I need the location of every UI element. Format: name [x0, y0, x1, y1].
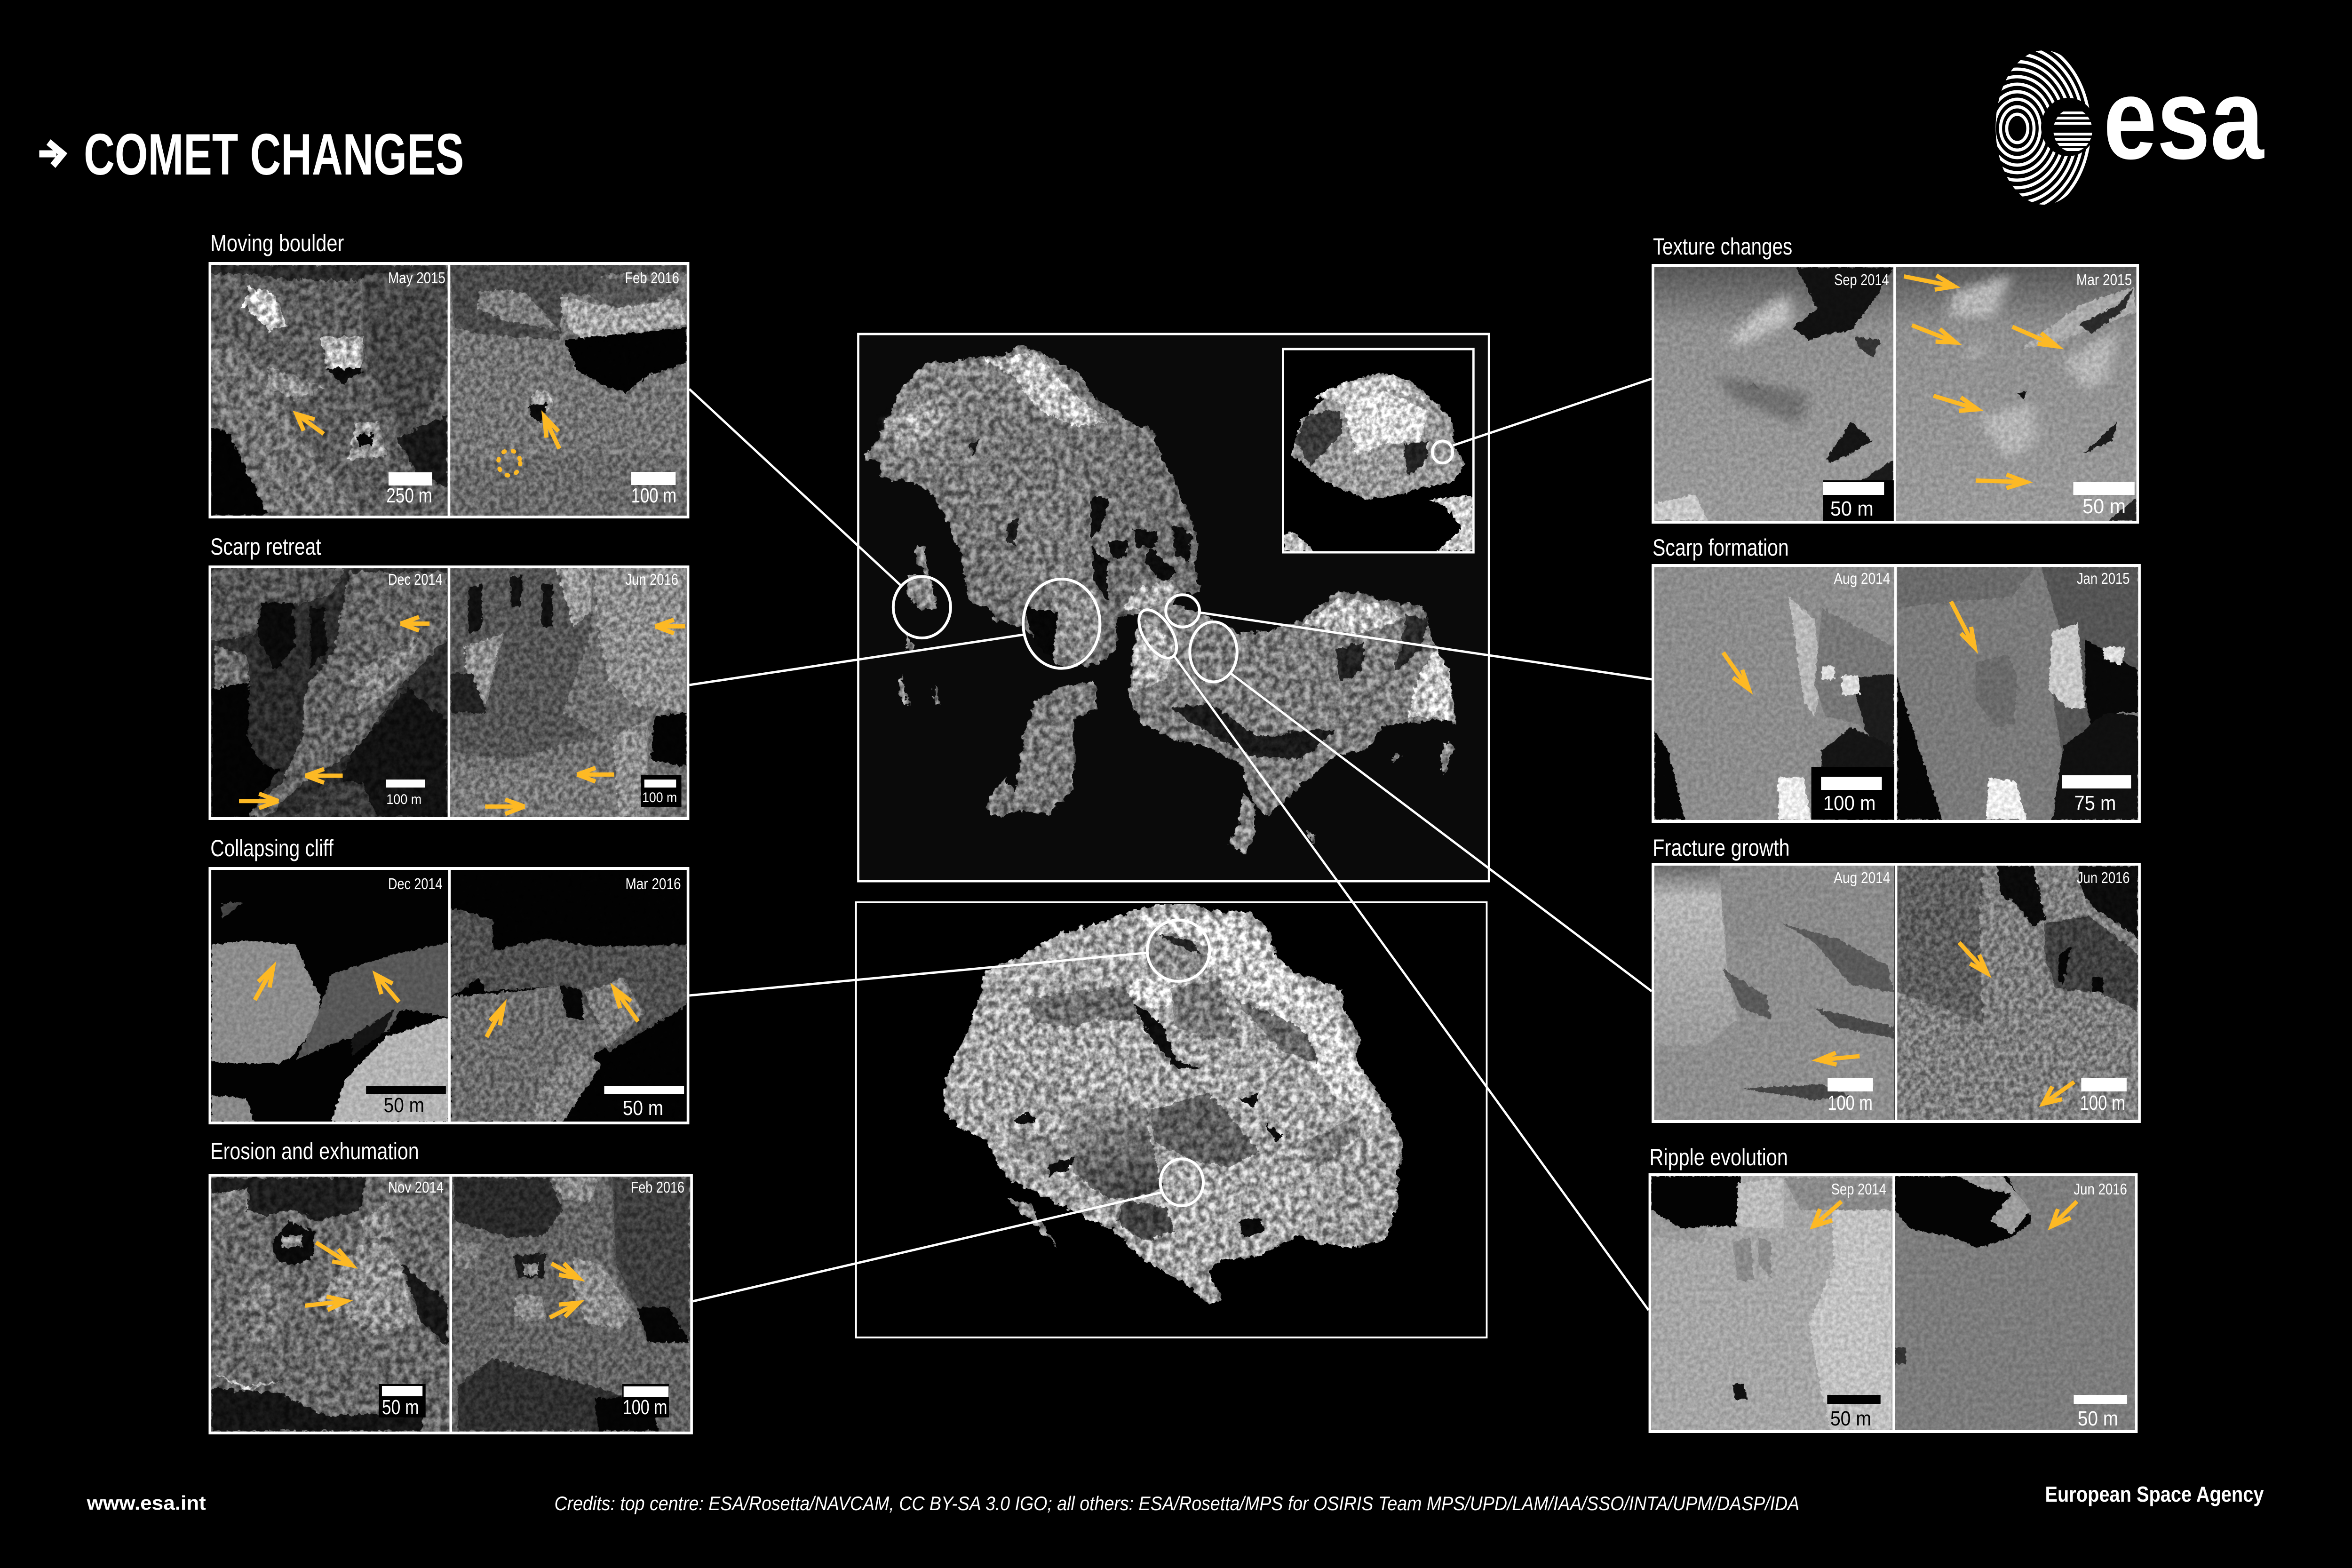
- panel: collapsing cliff: 50 m: [384, 1094, 424, 1117]
- title: [39, 122, 464, 187]
- panel: fracture growth: [1650, 835, 2142, 1123]
- connector lines: [689, 379, 1652, 1310]
- dates: Dec 2014: [388, 875, 442, 892]
- image: May 2015: [206, 261, 454, 519]
- panel: fracture growth: 100 m: [1828, 1091, 1873, 1114]
- frame: [210, 868, 688, 1123]
- heading: Collapsing cliff: [210, 836, 334, 861]
- scale bars: [1823, 482, 1884, 495]
- panel: texture changes: Mar 2015: [2076, 271, 2132, 288]
- image: Aug 2014: [1650, 862, 1899, 1123]
- title text: COMET CHANGES: [84, 122, 464, 187]
- bottom centre frame: [856, 902, 1487, 1337]
- panel: texture changes: 50 m: [1830, 497, 1874, 520]
- arrows: [1818, 942, 2074, 1104]
- scale bars: [1827, 1395, 1881, 1404]
- arrows: [255, 967, 638, 1037]
- panel: moving boulder: 250 m: [386, 484, 432, 507]
- panel: erosion and exhumation: 100 m: [623, 1396, 667, 1419]
- image: Jun 2016: [1891, 1174, 2140, 1433]
- panel: fracture growth: Jun 2016: [2077, 869, 2130, 886]
- panel: ripple evolution: 50 m: [1830, 1407, 1871, 1430]
- scale background: [1812, 767, 1894, 820]
- heading: Erosion and exhumation: [210, 1138, 419, 1164]
- panel: texture changes: [1649, 234, 2140, 523]
- panel: erosion and exhumation: [208, 1138, 695, 1433]
- icon: title arrow: [39, 142, 63, 166]
- panel: texture changes: 50 m: [2082, 495, 2126, 518]
- scale backgrounds: [379, 1384, 426, 1417]
- dates: May 2015: [388, 269, 445, 287]
- image: Jan 2015: [1893, 564, 2142, 821]
- scale bars: [389, 472, 432, 486]
- frame: [1653, 265, 2137, 522]
- heading: Scarp formation: [1653, 535, 1789, 561]
- panel: inset comet lobe: [1283, 349, 1473, 552]
- icon: ESA swirl: [1995, 50, 2092, 205]
- image: Jun 2016: [449, 566, 690, 820]
- top centre frame: [858, 334, 1489, 881]
- panel: moving boulder: Feb 2016: [625, 269, 679, 287]
- dates: Nov 2014: [388, 1178, 444, 1196]
- panel: fracture growth: 100 m: [2080, 1091, 2125, 1114]
- dates: Aug 2014: [1834, 570, 1890, 587]
- image: Aug 2014: [1650, 564, 1899, 821]
- inset frame: [1283, 349, 1473, 552]
- frame: [1653, 565, 2139, 821]
- image: Feb 2016: [449, 1175, 695, 1433]
- image: Mar 2016: [449, 867, 690, 1124]
- heading: Texture changes: [1653, 234, 1792, 260]
- panel: scarp formation: 75 m: [2074, 792, 2116, 815]
- comet photo: [944, 904, 1403, 1305]
- feature ellipses on top comet: [893, 441, 1453, 682]
- panel: scarp retreat: 100 m: [642, 790, 677, 805]
- dates: Sep 2014: [1834, 271, 1889, 288]
- image: Sep 2014: [1649, 264, 1898, 523]
- panel: bottom centre comet image: [856, 902, 1487, 1337]
- frame: [210, 263, 688, 517]
- frame: [210, 1175, 691, 1433]
- frame: [210, 567, 688, 819]
- panel: scarp formation: Jan 2015: [2077, 570, 2130, 587]
- scale bars: [1821, 777, 1882, 790]
- scale bars: [386, 780, 425, 788]
- scale background: [1823, 480, 1894, 521]
- panel: moving boulder: [206, 231, 691, 519]
- image: Dec 2014: [208, 867, 451, 1124]
- dates: Dec 2014: [388, 571, 442, 588]
- panel: collapsing cliff: [208, 836, 690, 1124]
- dates: Aug 2014: [1834, 869, 1890, 886]
- panel: collapsing cliff: Mar 2016: [625, 875, 681, 892]
- frame: [1650, 1175, 2137, 1432]
- feature ellipses on bottom comet: [1147, 920, 1210, 1206]
- website: www.esa.int: [87, 1492, 206, 1514]
- scale background: [641, 775, 682, 807]
- esa wordmark: esa: [2103, 55, 2265, 183]
- arrows and dotted outline: [296, 414, 559, 476]
- panel: scarp retreat: 100 m: [386, 792, 421, 807]
- agency name: European Space Agency: [2045, 1483, 2264, 1506]
- scale bars: [382, 1386, 422, 1396]
- ESA logo: [1995, 50, 2265, 205]
- panel: scarp formation: [1650, 535, 2142, 821]
- arrows: [305, 1242, 579, 1318]
- frame: [1653, 864, 2139, 1122]
- heading: Fracture growth: [1653, 835, 1790, 861]
- panel: collapsing cliff: 50 m: [623, 1097, 663, 1120]
- dates: Sep 2014: [1831, 1180, 1886, 1198]
- scale bars: [366, 1086, 446, 1094]
- footer: [87, 1483, 2264, 1514]
- image: Mar 2015: [1893, 264, 2140, 523]
- heading: Ripple evolution: [1649, 1145, 1788, 1170]
- panel: moving boulder: 100 m: [631, 484, 676, 507]
- image: Nov 2014: [208, 1175, 453, 1433]
- heading: Scarp retreat: [210, 534, 321, 560]
- arrows: [239, 617, 685, 814]
- image: Feb 2016: [447, 261, 691, 519]
- arrows: [1723, 602, 1975, 689]
- panel: erosion and exhumation: 50 m: [382, 1396, 419, 1419]
- panel: ripple evolution: [1649, 1145, 2140, 1433]
- panel: erosion and exhumation: Feb 2016: [631, 1178, 684, 1196]
- panel: ripple evolution: Jun 2016: [2074, 1180, 2127, 1198]
- image: Sep 2014: [1649, 1174, 1896, 1433]
- credits: Credits: top centre: ESA/Rosetta/NAVCAM, CC BY-SA 3.0 IGO; all others: ESA/Rosetta/MPS for OSIRIS Team MPS/UPD/LAM/IAA/SSO/INTA/UPM/DASP/IDA: [555, 1492, 1799, 1514]
- scale bars: [1828, 1078, 1873, 1091]
- panel: scarp formation: 100 m: [1823, 792, 1875, 815]
- panel: top centre comet image: [858, 334, 1489, 881]
- image: Jun 2016: [1893, 862, 2142, 1123]
- arrows: [1813, 1202, 2077, 1226]
- arrows: [1904, 275, 2057, 488]
- panel: scarp retreat: Jun 2016: [625, 571, 678, 588]
- panel: ripple evolution: 50 m: [2078, 1407, 2118, 1430]
- comet photo: [858, 334, 1488, 881]
- image: Dec 2014: [208, 566, 451, 820]
- panel: scarp retreat: [208, 534, 690, 820]
- heading: Moving boulder: [210, 231, 344, 256]
